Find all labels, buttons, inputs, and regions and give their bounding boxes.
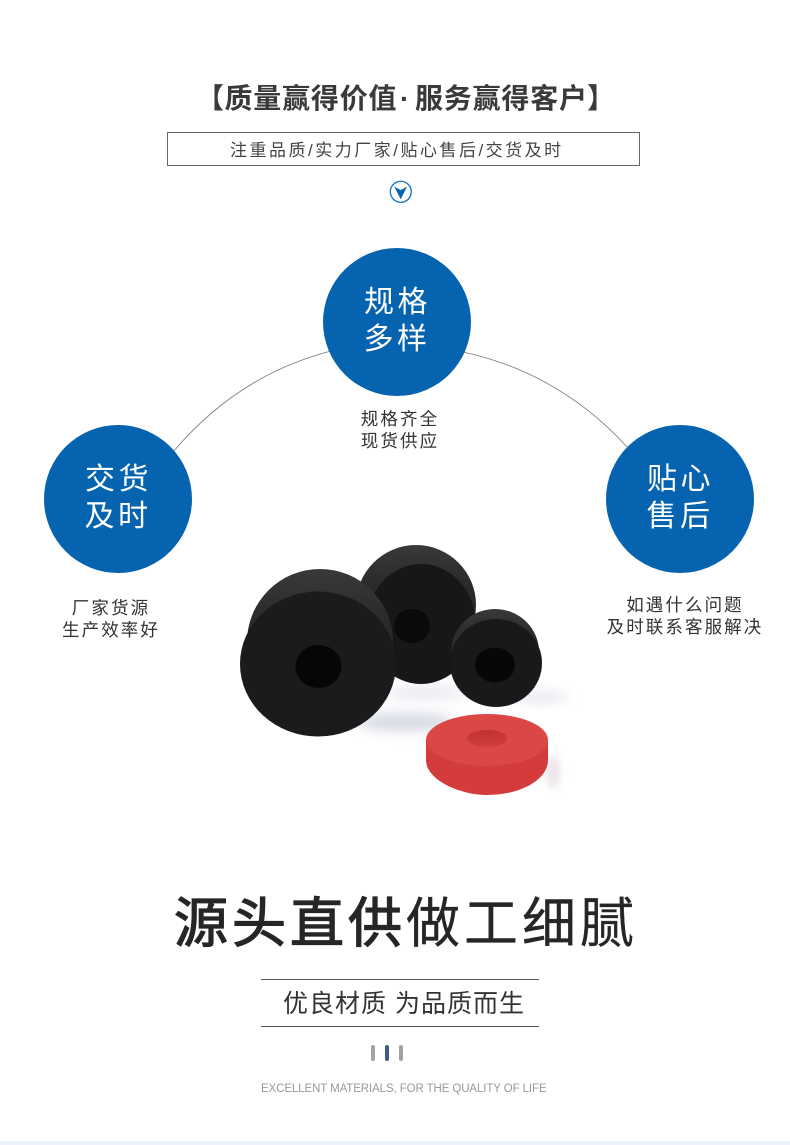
decorative bars <box>371 1045 403 1061</box>
circle text: 交货 <box>85 463 152 496</box>
circle text: 规格 <box>364 286 431 319</box>
shadows <box>357 687 568 788</box>
text: 】 <box>587 83 616 114</box>
text: 厂家货源 <box>62 598 160 640</box>
circle: 贴心售后 <box>606 425 754 573</box>
bottom strip <box>0 1141 790 1145</box>
footer slogan block <box>261 979 539 1027</box>
red ring <box>426 714 548 795</box>
text: 如遇什么问题: 及时联系客服解决 <box>607 617 763 637</box>
title: · <box>400 83 410 114</box>
subtitle text: 注重品质/实力厂家/贴心售后/交货及时 <box>230 141 564 160</box>
slogan text: 优良材质 为品质而生 <box>283 990 525 1018</box>
circle text: 贴心 <box>647 463 714 496</box>
text: 规格齐全: 规格齐全 <box>361 409 439 429</box>
circle: 交货及时 <box>44 425 192 573</box>
middle black ring <box>356 545 476 684</box>
small black ring <box>450 609 542 707</box>
text: 如遇什么问题: 如遇什么问题 <box>626 595 744 615</box>
circle text <box>84 463 152 533</box>
circle text <box>646 463 714 533</box>
text: 厂家货源: 厂家货源 <box>72 598 150 618</box>
text: 规格齐全: 现货供应 <box>361 431 439 451</box>
circle text: 及时 <box>84 500 152 533</box>
large black ring <box>240 569 396 736</box>
english caption: EXCELLENT MATERIALS, FOR THE QUALITY OF LIFE <box>261 1083 547 1095</box>
text: 如遇什么问题 <box>607 595 763 637</box>
circle text <box>364 286 431 356</box>
circle: 规格多样 <box>323 248 471 396</box>
circle text: 售后 <box>646 500 714 533</box>
text: 规格齐全 <box>361 409 439 451</box>
title: 服务赢得客户 <box>415 83 588 114</box>
text: 厂家货源: 生产效率好 <box>62 620 160 640</box>
product photo: rubber rings <box>240 545 564 795</box>
connecting arc <box>174 351 628 451</box>
icon: down chevron <box>390 180 412 203</box>
circle text: 多样 <box>364 323 430 356</box>
title: 【 <box>196 83 225 114</box>
title: 质量赢得价值 <box>224 83 397 114</box>
title <box>196 83 616 114</box>
main heading: 源头直供做工细腻 <box>174 894 638 954</box>
subtitle box <box>167 132 640 166</box>
